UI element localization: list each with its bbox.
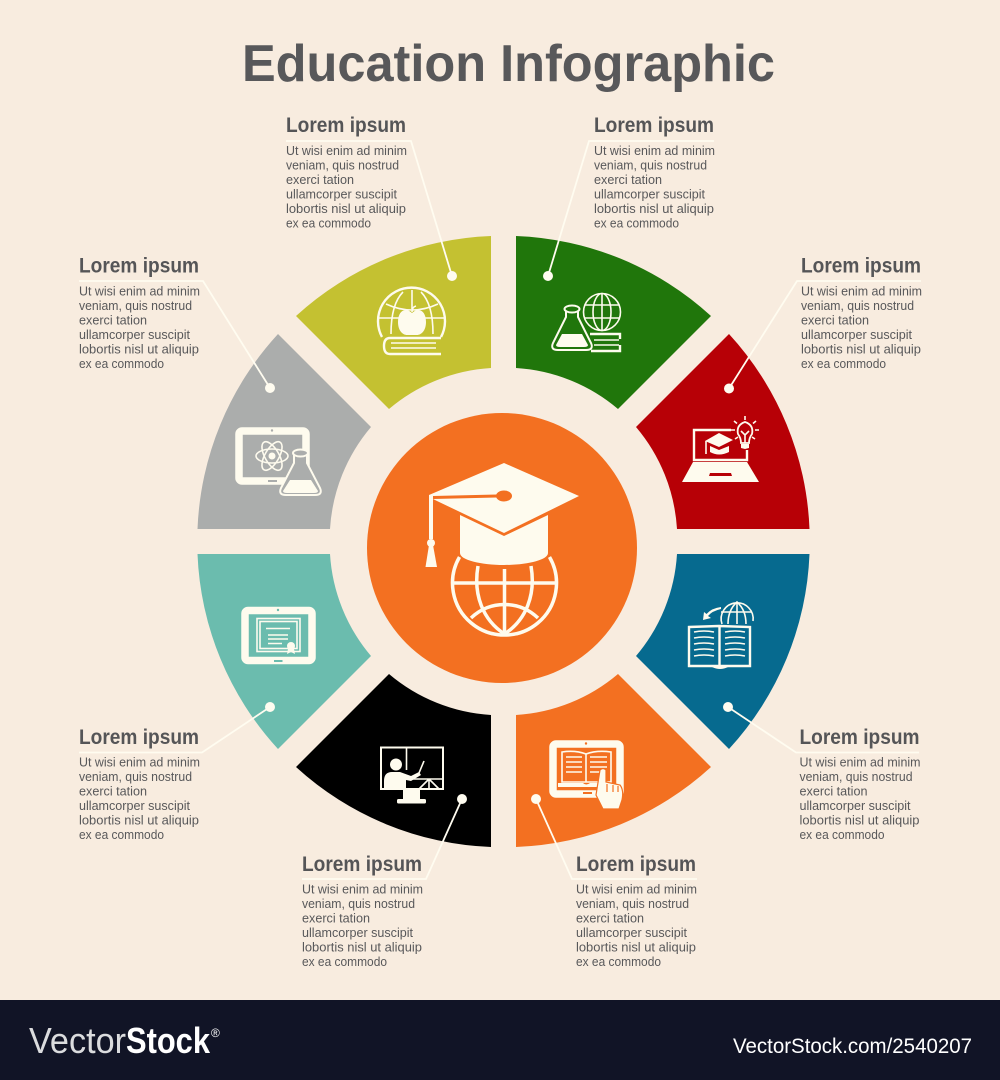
text block: lower right: ex ea commodo (800, 827, 884, 842)
text block: lower left: Ut wisi enim ad minim (79, 754, 200, 770)
text block: bottom left: lobortis nisl ut aliquip (302, 940, 422, 954)
text block: bottom right: Ut wisi enim ad minim (576, 882, 697, 896)
panel: center circle (367, 413, 637, 683)
cap body (460, 515, 548, 565)
text block: lower left: ex ea commodo (79, 827, 164, 842)
text block: top left (286, 113, 407, 230)
icon: tablet with diploma (245, 609, 312, 662)
text block: bottom left: veniam, quis nostrud (302, 896, 415, 911)
leader line: bottom right (531, 794, 697, 879)
leader line: lower right (723, 702, 919, 752)
icon: graduation cap over globe (426, 463, 579, 635)
panel: orange segment (516, 674, 711, 847)
text block: bottom left: Ut wisi enim ad minim (302, 882, 423, 896)
text block: lower left: veniam, quis nostrud (79, 769, 192, 784)
panel: red segment (636, 334, 810, 529)
text block: upper left: Ut wisi enim ad minim (79, 284, 200, 298)
text block: top right: Ut wisi enim ad minim (594, 143, 715, 158)
text block: top right: exerci tation (594, 172, 662, 187)
globe (452, 557, 556, 635)
icon: open book with globe (689, 602, 753, 669)
panel: blue segment (636, 554, 810, 749)
icon: laptop cap bulb (682, 416, 759, 482)
footer bar (0, 1000, 1000, 1080)
text block: bottom left: exerci tation (302, 910, 370, 926)
text block: bottom left: ullamcorper suscipit (302, 925, 413, 940)
text block: upper left (79, 254, 200, 371)
text block: bottom right: ullamcorper suscipit (576, 925, 687, 940)
text block: upper left: ullamcorper suscipit (79, 327, 190, 342)
text block: bottom right: lobortis nisl ut aliquip (576, 940, 696, 954)
text block: top left: lobortis nisl ut aliquip (286, 201, 406, 216)
text block: bottom right: exerci tation (576, 910, 644, 926)
leader line: top left (286, 141, 457, 281)
text block: top left: Lorem ipsum (286, 113, 406, 137)
text block: top right: ullamcorper suscipit (594, 186, 705, 202)
leader line: bottom left (302, 794, 467, 879)
panel: grey segment (198, 334, 371, 529)
text block: lower left: Lorem ipsum (79, 725, 199, 749)
panel: black segment (296, 674, 491, 847)
text block: top left: exerci tation (286, 172, 354, 187)
text block: bottom left: ex ea commodo (302, 954, 387, 969)
text block: top right: lobortis nisl ut aliquip (594, 201, 714, 216)
icon: flask globe book (552, 293, 620, 351)
panel: teal segment (198, 554, 371, 749)
panel: green segment (516, 236, 711, 409)
footer logo: Stock (126, 1020, 211, 1061)
text block: top right: veniam, quis nostrud (594, 158, 707, 172)
leader line: lower left (79, 702, 275, 752)
leader line: upper left (79, 281, 275, 393)
text block: lower left: ullamcorper suscipit (79, 798, 190, 813)
icon: teacher at blackboard (381, 748, 443, 804)
title: Education Infographic (242, 35, 775, 93)
text block: lower right: ullamcorper suscipit (800, 798, 911, 813)
text block: upper right: Ut wisi enim ad minim (801, 284, 922, 298)
icon: globe apple book (378, 288, 445, 354)
text block: lower right: Ut wisi enim ad minim (800, 754, 920, 770)
text block: bottom left: Lorem ipsum (302, 852, 422, 876)
footer logo: ® (211, 1026, 220, 1040)
text block: upper left: lobortis nisl ut aliquip (79, 342, 199, 356)
text block: bottom right (576, 852, 697, 969)
text block: upper right: ex ea commodo (801, 356, 886, 371)
tassel (429, 495, 433, 539)
footer logo: Vector (29, 1020, 126, 1061)
text block: bottom left (302, 852, 423, 969)
text block: lower left: lobortis nisl ut aliquip (79, 812, 199, 828)
mortarboard (429, 463, 579, 533)
icon: tablet with atom and flask (239, 429, 321, 495)
text block: lower right: exerci tation (800, 784, 868, 798)
text block: upper right (801, 254, 922, 371)
text block: lower right: Lorem ipsum (800, 725, 920, 749)
text block: lower right: veniam, quis nostrud (800, 769, 912, 784)
text block: upper left: ex ea commodo (79, 356, 164, 371)
leader line: top right (543, 141, 714, 281)
text block: top left: ullamcorper suscipit (286, 186, 397, 202)
text block: upper left: exerci tation (79, 312, 147, 328)
icon: tablet with book and hand (553, 742, 623, 809)
text block: top right: Lorem ipsum (594, 113, 714, 137)
text block: lower left: exerci tation (79, 784, 147, 798)
text block: upper right: lobortis nisl ut aliquip (801, 342, 921, 356)
text block: lower right: lobortis nisl ut aliquip (800, 812, 920, 828)
panel: yellow-green segment (296, 236, 491, 409)
text block: top left: Ut wisi enim ad minim (286, 143, 407, 158)
footer url: VectorStock.com/2540207 (733, 1035, 972, 1058)
text block: top left: veniam, quis nostrud (286, 158, 399, 172)
text block: lower left (79, 725, 200, 842)
text block: top left: ex ea commodo (286, 216, 371, 230)
text block: upper right: ullamcorper suscipit (801, 327, 912, 342)
text block: upper right: veniam, quis nostrud (801, 298, 914, 313)
text block: top right: ex ea commodo (594, 216, 679, 230)
footer logo (29, 1020, 220, 1061)
text block: bottom right: ex ea commodo (576, 954, 661, 969)
text block: upper left: veniam, quis nostrud (79, 298, 192, 313)
text block: upper right: exerci tation (801, 312, 869, 328)
leader line: upper right (724, 281, 921, 394)
text block: top right (594, 113, 715, 230)
text block: bottom right: veniam, quis nostrud (576, 896, 689, 911)
text block: upper left: Lorem ipsum (79, 254, 199, 278)
text block: lower right (800, 725, 920, 842)
text block: upper right: Lorem ipsum (801, 254, 921, 278)
text block: bottom right: Lorem ipsum (576, 852, 696, 876)
